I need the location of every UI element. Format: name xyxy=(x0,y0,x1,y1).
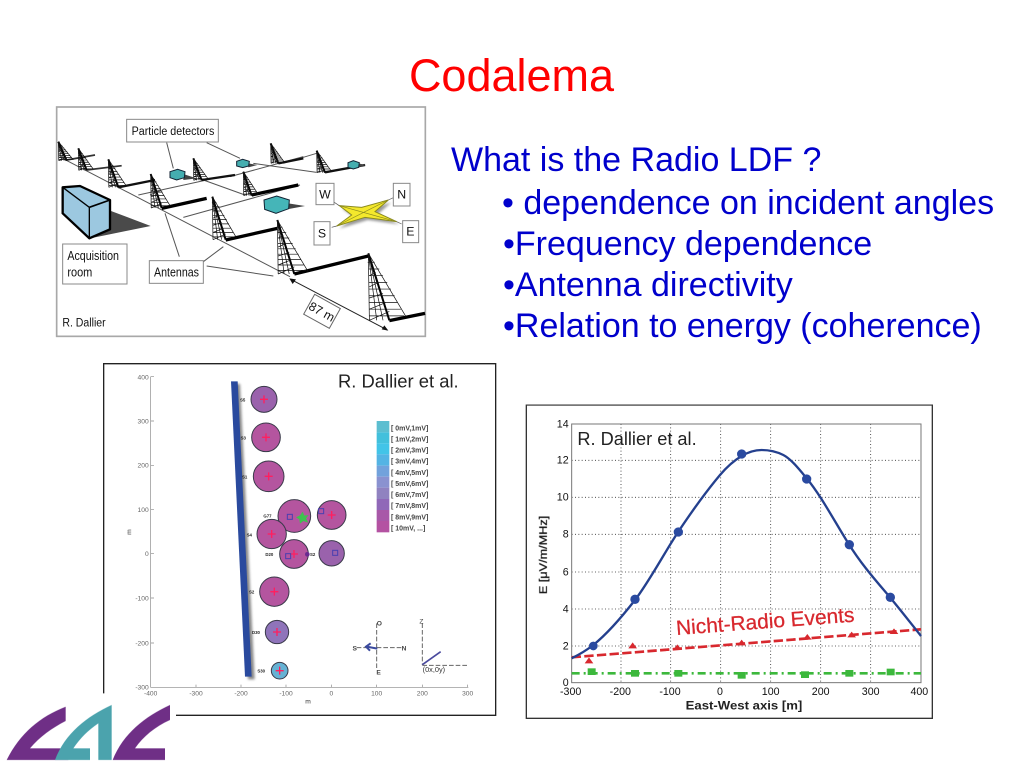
panel: antenna signal map: m xyxy=(126,529,133,535)
text block: questions xyxy=(451,141,994,345)
antenna ids: G77 xyxy=(263,513,272,518)
compass labels xyxy=(314,183,419,245)
y axis title: E [μV/m/MHz] xyxy=(538,516,550,594)
antenna ids: D20 xyxy=(265,552,274,557)
label: particle detectors xyxy=(127,119,218,142)
x tick labels: -100 xyxy=(659,686,681,698)
legend: [ 6mV,7mV] xyxy=(391,492,428,499)
compass inset: O xyxy=(377,621,382,628)
panel: antenna signal map: 300 xyxy=(462,690,474,697)
legend: [ 5mV,6mV] xyxy=(391,481,428,488)
x tick labels: -300 xyxy=(560,686,581,698)
antenna ids: D30 xyxy=(252,630,261,635)
y tick labels: 12 xyxy=(557,455,569,467)
label lines xyxy=(165,143,273,276)
compass inset xyxy=(352,621,407,676)
x tick labels: 100 xyxy=(762,686,780,698)
label: acquisition room xyxy=(63,244,127,284)
antennas xyxy=(58,142,406,320)
y tick labels: 14 xyxy=(557,418,569,430)
label: acquisition room: Acquisition xyxy=(67,249,119,263)
blue fit curve xyxy=(572,450,921,658)
legend: [ 4mV,5mV] xyxy=(391,470,428,477)
compass labels: N xyxy=(397,188,406,202)
map tick labels: -100 xyxy=(135,595,149,602)
plot box xyxy=(572,424,921,683)
legend: [ 0mV,1mV] xyxy=(391,425,428,432)
x axis title: East-West axis [m] xyxy=(686,699,802,712)
map tick labels: -200 xyxy=(135,640,149,647)
legend: [ 10mV, ...] xyxy=(391,525,425,532)
x tick labels: 200 xyxy=(812,686,830,698)
x tick labels xyxy=(560,686,928,698)
y tick labels: 0 xyxy=(563,677,569,689)
map tick labels: 0 xyxy=(145,551,149,558)
legend: [ 2mV,3mV] xyxy=(391,448,428,455)
map tick labels: -300 xyxy=(135,685,149,692)
panel: antenna signal map: -100 xyxy=(279,690,293,697)
logo xyxy=(0,698,170,768)
text block: questions: •Relation to energy (coherence) xyxy=(503,307,982,345)
panel: antenna signal map: -200 xyxy=(234,690,248,697)
antenna ids: S2 xyxy=(310,552,316,557)
credit: R. Dallier et al. xyxy=(577,428,697,449)
dimension: 87 m xyxy=(289,278,388,331)
shower axis bar xyxy=(234,384,255,679)
legend: [ 1mV,2mV] xyxy=(391,437,428,444)
legend: [ 7mV,8mV] xyxy=(391,503,428,510)
text block: questions: •Frequency dependence xyxy=(503,225,872,263)
x tick labels: -200 xyxy=(610,686,631,698)
compass inset: E xyxy=(376,669,381,676)
credit: R. Dallier xyxy=(62,316,106,330)
thin cable lines xyxy=(59,153,317,277)
legend: [ 8mV,9mV] xyxy=(391,514,428,521)
panel: antenna signal map: 200 xyxy=(417,690,428,697)
legend xyxy=(377,421,428,532)
acquisition room xyxy=(63,186,151,238)
grid xyxy=(572,424,921,683)
text block: questions: •Antenna directivity xyxy=(503,266,793,304)
panel: antenna signal map: m xyxy=(305,698,311,705)
green noise series xyxy=(572,668,921,679)
map tick labels: 300 xyxy=(138,418,149,425)
text block: questions: • dependence on incident angles xyxy=(502,184,994,222)
red series xyxy=(572,628,921,663)
antenna ids: S30 xyxy=(257,669,266,674)
antenna circles xyxy=(251,386,346,679)
label: antennas xyxy=(149,261,203,283)
x tick labels: 400 xyxy=(910,686,928,698)
axes inset xyxy=(419,618,468,674)
x tick labels: 300 xyxy=(862,686,880,698)
y tick labels: 6 xyxy=(563,566,569,578)
map tick labels: 200 xyxy=(138,463,149,470)
antenna ids: S2 xyxy=(249,590,255,595)
blue points xyxy=(589,449,895,650)
compass labels: S xyxy=(318,226,326,240)
compass star xyxy=(332,198,402,229)
y tick labels xyxy=(557,418,569,689)
y tick labels: 2 xyxy=(563,640,569,652)
x tick labels: 0 xyxy=(717,686,723,698)
antenna ids xyxy=(240,397,316,674)
logo right C xyxy=(113,705,170,760)
y tick labels: 10 xyxy=(557,492,569,504)
antenna ids: S1 xyxy=(242,474,248,479)
panel: antenna signal map: 0 xyxy=(329,690,333,697)
compass inset: N xyxy=(402,645,407,652)
antenna feed lines xyxy=(67,155,122,170)
logo left C xyxy=(7,707,68,760)
axes inset: (0x,0y) xyxy=(423,665,445,674)
map tick labels: 100 xyxy=(138,507,149,514)
map axes xyxy=(151,377,468,687)
callout: non-radio events: Nicht-Radio Events xyxy=(675,604,855,640)
logo A xyxy=(55,705,112,760)
panel: antenna signal map: 100 xyxy=(371,690,383,697)
text block: questions: What is the Radio LDF ? xyxy=(451,141,821,179)
antenna ids: S5 xyxy=(240,397,246,402)
red crosses xyxy=(260,395,336,675)
credit: R. Dallier et al. xyxy=(338,370,459,391)
panel: antenna signal map: -400 xyxy=(144,690,158,697)
label: antennas: Antennas xyxy=(154,266,199,280)
antenna ids: S3 xyxy=(241,435,247,440)
label: acquisition room: room xyxy=(67,266,92,280)
map tick labels: 400 xyxy=(138,374,149,381)
compass inset: S xyxy=(352,645,357,652)
compass labels: E xyxy=(406,225,414,239)
panel: antenna signal map xyxy=(104,364,496,715)
particle markers xyxy=(286,509,338,559)
compass labels: W xyxy=(319,187,331,201)
legend: [ 3mV,4mV] xyxy=(391,459,428,466)
axes inset: Z xyxy=(419,618,423,625)
y tick labels: 8 xyxy=(563,529,569,541)
particle detectors xyxy=(170,159,366,213)
label: particle detectors: Particle detectors xyxy=(132,124,214,138)
panel: array layout diagram xyxy=(57,107,425,336)
panel: E field chart xyxy=(526,405,932,718)
antenna ids: S4 xyxy=(247,532,253,537)
dimension: 87 m: 87 m xyxy=(306,299,337,325)
y tick labels: 4 xyxy=(563,603,569,615)
panel: antenna signal map: -300 xyxy=(189,690,203,697)
title: Codalema xyxy=(409,50,615,101)
map tick labels xyxy=(135,374,149,692)
